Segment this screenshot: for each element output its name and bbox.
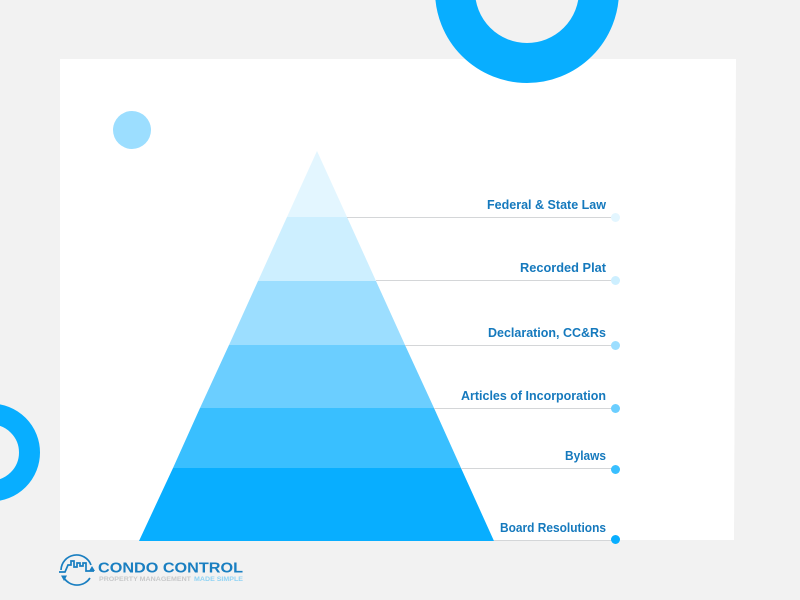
label: Bylaws (461, 448, 620, 474)
logo wordmark: CONDO CONTROL (98, 560, 243, 576)
tier 6: Board Resolutions (139, 468, 494, 541)
label: Declaration, CC&Rs (405, 325, 620, 350)
decorative dot (113, 111, 151, 149)
tier 4: Articles of Incorporation (200, 345, 434, 408)
label: Articles of Incorporation (434, 388, 620, 413)
label: Articles of Incorporation: Articles of Incorporation (461, 388, 606, 403)
icon: city in circular arrows (59, 555, 95, 585)
label: Board Resolutions: Board Resolutions (500, 520, 606, 535)
label: Recorded Plat (376, 260, 620, 285)
logo tagline: PROPERTY MANAGEMENT (99, 576, 191, 583)
logo: Condo Control (59, 555, 244, 585)
label: Declaration, CC&Rs: Declaration, CC&Rs (488, 325, 606, 340)
tier 1: Federal & State Law (287, 151, 347, 217)
tier 2: Recorded Plat (258, 217, 376, 281)
label: Federal & State Law (347, 197, 620, 222)
logo tagline accent: MADE SIMPLE (194, 576, 244, 583)
label: Federal & State Law: Federal & State Law (487, 197, 607, 212)
label: Board Resolutions (494, 520, 620, 544)
white panel (60, 59, 736, 540)
pyramid chart (139, 151, 494, 541)
decorative ring: top (455, 0, 599, 63)
tier 5: Bylaws (173, 408, 461, 468)
label: Recorded Plat: Recorded Plat (520, 260, 607, 275)
decorative ring: left (0, 414, 30, 491)
label: Bylaws: Bylaws (565, 448, 606, 463)
tier 3: Declaration, CC&Rs (229, 281, 405, 345)
